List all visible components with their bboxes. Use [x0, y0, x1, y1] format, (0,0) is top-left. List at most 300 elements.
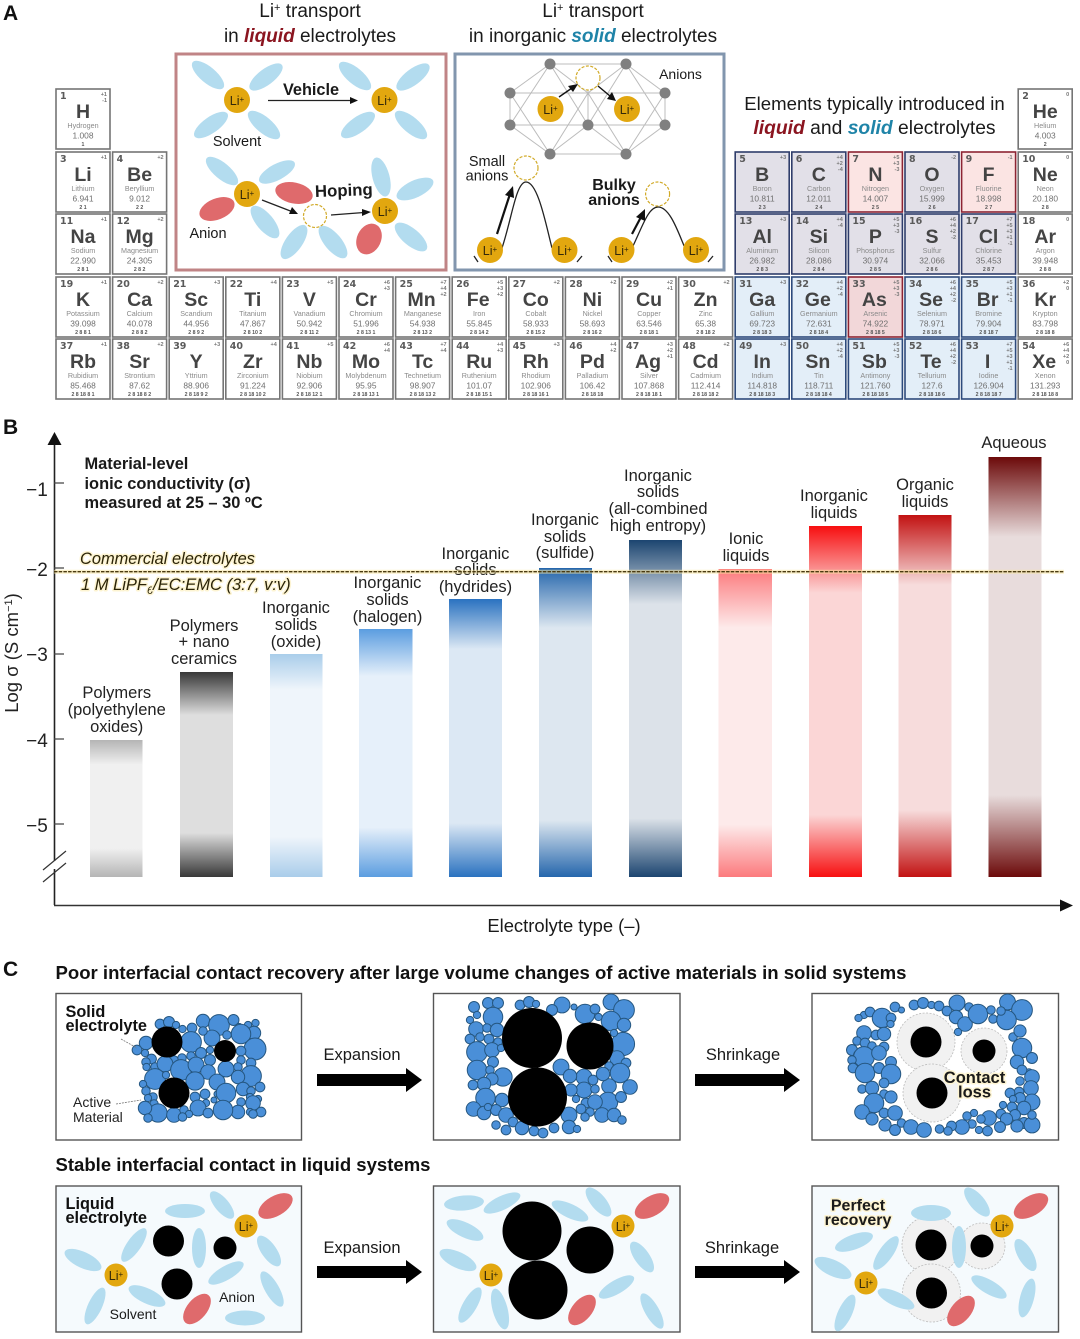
element Tc: 98.907	[410, 380, 436, 390]
element Sb: Antimony	[860, 371, 891, 380]
element S: S	[925, 226, 939, 248]
element Sb: +5	[893, 342, 899, 348]
element Se: +4	[950, 286, 957, 292]
y tick labels: −1	[26, 480, 48, 501]
element In: 114.818	[747, 380, 777, 390]
element Sc	[169, 277, 223, 337]
element Nb: 2 8 18 12 1	[296, 392, 322, 398]
element Ge: +2	[837, 286, 843, 292]
element Kr: 2 8 18 8	[1036, 330, 1055, 336]
panel letter A: A	[3, 2, 18, 25]
element Be: Be	[127, 164, 152, 186]
element Al	[735, 214, 789, 274]
element Ne: 10	[1022, 154, 1036, 165]
element As: +5	[893, 280, 899, 286]
shrunken active particles	[910, 1026, 996, 1108]
element In: In	[754, 351, 771, 373]
element Ca: +2	[157, 280, 164, 286]
element B: 10.811	[750, 194, 775, 204]
bar labels: Polymers	[82, 684, 151, 702]
element Sb: 2 8 18 18 5	[862, 392, 888, 398]
element P: 2 8 5	[870, 267, 881, 273]
element Se	[905, 277, 959, 337]
element I: +3	[1006, 354, 1013, 360]
x axis arrow	[54, 900, 1073, 912]
reference line: commercial electrolytes	[54, 570, 1064, 574]
element N: +5	[893, 155, 899, 161]
element Sn: +4	[837, 342, 843, 348]
element C: 12.011	[806, 194, 832, 204]
element I: +7	[1006, 342, 1013, 348]
element Cl: +5	[1006, 223, 1013, 229]
anion lattice: Li	[543, 103, 553, 117]
lithium ions: +	[494, 1270, 499, 1279]
element Si: +4	[837, 217, 843, 223]
heading: liquid transport: in liquid electrolytes	[224, 26, 396, 47]
element Na: Sodium	[71, 246, 95, 255]
bar labels: Organic	[896, 476, 954, 494]
element Xe: Xe	[1032, 351, 1056, 373]
element Se: 78.971	[919, 318, 945, 328]
solvent molecules	[61, 1187, 288, 1327]
element Xe: 131.293	[1030, 380, 1061, 390]
label: Vehicle: Vehicle	[283, 81, 339, 99]
element Fe: +3	[497, 286, 503, 292]
element Ar: Ar	[1034, 226, 1056, 248]
element Si: -4	[838, 223, 844, 229]
label: electrolyte composition: 6	[147, 585, 154, 597]
element K	[56, 277, 110, 337]
lithium ions: Li	[239, 1220, 249, 1234]
element Fe: Fe	[467, 289, 490, 311]
element Ge: -4	[838, 292, 844, 298]
solvent molecules	[436, 1183, 668, 1332]
element Cd: +2	[723, 342, 730, 348]
hopping start shell: Li	[240, 188, 250, 202]
element Cl: -1	[1008, 241, 1013, 247]
element Zr: 40	[230, 341, 243, 352]
small anion barrier	[474, 156, 582, 263]
hopping vacancy	[276, 204, 352, 263]
element Br: +1	[1006, 292, 1013, 298]
bulky anion barrier: Li	[689, 244, 699, 258]
element Ru: Ru	[466, 351, 492, 373]
bar: inorganic liquids	[809, 526, 862, 877]
element K: 19	[60, 279, 73, 290]
element As: +3	[893, 286, 899, 292]
element Fe: 26	[456, 279, 470, 290]
element Tc: +7	[440, 342, 447, 348]
element I: +5	[1006, 348, 1013, 354]
bar labels: solids	[637, 483, 679, 501]
element Te: +2	[950, 354, 956, 360]
element N: -3	[895, 167, 899, 173]
element Fe: +2	[497, 292, 503, 298]
element Mg	[113, 214, 167, 274]
element Li: Lithium	[71, 184, 95, 193]
lithium ions	[480, 1214, 634, 1286]
element Li: 2 1	[79, 205, 87, 211]
element Si: 14	[796, 216, 809, 227]
element Ni: +2	[610, 280, 616, 286]
element Ge: +4	[837, 280, 843, 286]
element Ag: Ag	[635, 351, 661, 373]
element Co: 27	[513, 279, 526, 290]
label: solid electrolyte: electrolyte	[66, 1017, 147, 1035]
element Pd: +2	[610, 348, 616, 354]
element H: 1.008	[73, 130, 94, 140]
element Fe: 55.845	[466, 318, 492, 328]
element Co: Cobalt	[525, 309, 546, 318]
arrow: expansion, solid	[317, 1068, 422, 1092]
element Pd: 46	[569, 341, 583, 352]
element Kr: 36	[1022, 279, 1036, 290]
element I: +1	[1006, 360, 1013, 366]
element H: H	[76, 101, 90, 123]
label: solvent: Solvent	[110, 1306, 156, 1322]
element Zn: 65.38	[695, 318, 716, 328]
element He: 2	[1044, 142, 1047, 148]
vehicle solvation shell, right	[335, 57, 434, 144]
element Ga	[735, 277, 789, 337]
element Cl	[962, 214, 1016, 274]
arrow: expansion, liquid	[317, 1260, 422, 1284]
element Zn: Zn	[694, 289, 718, 311]
bar labels: Aqueous	[981, 434, 1047, 452]
element Sc: Sc	[184, 289, 208, 311]
element Zr: Zr	[243, 351, 263, 373]
element Br: 2 8 18 7	[979, 330, 998, 336]
element Be: 2 2	[136, 205, 143, 211]
arrow: shrinkage, solid	[695, 1068, 800, 1092]
element Ru: 44	[456, 341, 470, 352]
label: Small anions: anions	[466, 168, 508, 184]
element Ne	[1018, 152, 1072, 212]
element N: 7	[852, 154, 859, 165]
element Rh: +3	[554, 342, 560, 348]
vehicle solvation shell, left	[188, 56, 287, 144]
element Mo	[339, 339, 393, 399]
element Nb: +5	[327, 342, 333, 348]
element B: B	[755, 164, 769, 186]
element Br: +5	[1006, 280, 1013, 286]
element Ag: 2 8 18 18 1	[636, 392, 662, 398]
heading: solid transport: +	[557, 2, 563, 14]
element Tc	[396, 339, 450, 399]
element N: +3	[893, 161, 899, 167]
element Tc: 43	[400, 341, 413, 352]
element Li	[56, 152, 110, 212]
element Kr: Krypton	[1033, 309, 1058, 318]
bar labels: + nano	[179, 633, 229, 651]
element Ca: 20	[117, 279, 130, 290]
element Na: 2 8 1	[77, 267, 89, 273]
element Cr	[339, 277, 393, 337]
heading: elements	[744, 93, 1005, 139]
element Mg: Magnesium	[121, 246, 158, 255]
element Fe: Iron	[473, 309, 485, 318]
bar labels: (polyethylene	[68, 701, 166, 719]
element Ga: +3	[780, 280, 786, 286]
element C: +4	[837, 155, 843, 161]
element Zr: +4	[271, 342, 278, 348]
label: liquid electrolyte: Liquid	[66, 1195, 114, 1213]
bar labels: (oxide)	[271, 633, 321, 651]
element Y: 39	[173, 341, 186, 352]
label: Small anions: Small	[469, 154, 505, 170]
element O: -2	[951, 155, 956, 161]
element Nb	[282, 339, 336, 399]
element Ni: 2 8 16 2	[583, 330, 602, 336]
element I: 2 8 18 18 7	[976, 392, 1002, 398]
element Be: 9.012	[129, 194, 150, 204]
element Xe: +4	[1063, 348, 1070, 354]
element F	[962, 152, 1016, 212]
element Ti: Ti	[244, 289, 261, 311]
y tick labels: −3	[26, 645, 48, 666]
element Ni	[565, 277, 619, 337]
element S: 32.066	[919, 256, 945, 266]
expanded active particles	[502, 1202, 614, 1320]
heading: elements: liquid and solid electrolytes	[753, 118, 996, 139]
note: measurement conditions: Material-level	[84, 455, 188, 473]
element C: C	[812, 164, 826, 186]
bar labels: high entropy)	[610, 517, 706, 535]
element F: Fluorine	[976, 184, 1002, 193]
element Mo: +6	[384, 342, 390, 348]
element V: 2 8 11 2	[300, 330, 319, 336]
bar: inorganic halogen	[359, 629, 412, 877]
element O: Oxygen	[920, 184, 944, 193]
solvent molecules	[811, 1183, 1041, 1334]
element I: 53	[966, 341, 979, 352]
element Li: 6.941	[73, 194, 94, 204]
element Se: +2	[950, 292, 956, 298]
element Te: 127.6	[922, 380, 943, 390]
element As: As	[862, 289, 887, 311]
element Cd	[679, 339, 733, 399]
element Nb: 41	[286, 341, 300, 352]
element Rh: Rh	[523, 351, 549, 373]
retained electrolyte particles	[847, 994, 1040, 1137]
hopping arrows	[262, 200, 371, 216]
element Cu: Copper	[637, 309, 661, 318]
element H: 1	[60, 91, 67, 102]
element Cd: Cd	[693, 351, 719, 373]
element S: Sulfur	[923, 246, 942, 255]
element Rh: 45	[513, 341, 526, 352]
element Cd: 48	[683, 341, 696, 352]
element Ag: +1	[667, 354, 673, 360]
element Ru	[452, 339, 506, 399]
vehicle solvation shell, right: Li	[377, 94, 387, 108]
bulky anion barrier: Li	[614, 244, 624, 258]
bulky anion barrier: +	[624, 245, 629, 254]
element V: 23	[286, 279, 300, 290]
element Ge: 2 8 18 4	[809, 330, 828, 336]
periodic table	[56, 89, 1072, 399]
element Ru: 101.07	[466, 380, 492, 390]
element Tc: +4	[440, 348, 448, 354]
element Ni: 58.693	[580, 318, 606, 328]
element K: 2 8 8 1	[75, 330, 91, 336]
element P: P	[869, 226, 882, 248]
heading: liquid transport	[224, 1, 396, 47]
small anion barrier: +	[493, 245, 498, 254]
element Mn: 54.938	[410, 318, 436, 328]
label: contact loss: Contact	[944, 1069, 1005, 1087]
element I: 126.904	[973, 380, 1004, 390]
element I: -1	[1008, 366, 1013, 372]
element Fe: +5	[497, 280, 503, 286]
element B: 5	[739, 154, 746, 165]
bar labels: liquids	[902, 493, 948, 511]
element Rb: Rb	[70, 351, 96, 373]
bar labels: Inorganic	[354, 574, 421, 592]
element Mn: +2	[440, 292, 447, 298]
note: measurement conditions: measured at 25 – 30 ºC	[84, 494, 263, 512]
bar labels: solids	[366, 591, 409, 609]
shrunken active particles	[916, 1230, 994, 1308]
element S: +6	[950, 217, 956, 223]
element P: +3	[893, 223, 899, 229]
element Y	[169, 339, 223, 399]
element Mo: 95.95	[356, 380, 377, 390]
element Zr: 2 8 18 10 2	[240, 392, 266, 398]
element B: Boron	[753, 184, 772, 193]
label: Hoping: Hoping	[315, 180, 373, 201]
bar: polymers	[90, 740, 142, 877]
lithium ions: +	[869, 1278, 874, 1287]
bar labels	[68, 434, 1047, 736]
anion lattice	[504, 58, 670, 160]
element Ni: 28	[569, 279, 583, 290]
element Te: 52	[909, 341, 922, 352]
element Cl: +1	[1006, 235, 1013, 241]
element Cl: +3	[1006, 229, 1013, 235]
label: Solvent: Solvent	[213, 134, 261, 150]
element Mg: 24.305	[127, 256, 153, 266]
element H: 1	[82, 142, 85, 148]
element Te: Tellurium	[918, 371, 946, 380]
element Rb	[56, 339, 110, 399]
element H	[56, 89, 110, 149]
element Sc: 44.956	[183, 318, 209, 328]
element H: Hydrogen	[67, 121, 99, 130]
x axis title: Electrolyte type (–)	[487, 915, 641, 936]
label: anion: Anion	[219, 1289, 255, 1305]
element Ge: 32	[796, 279, 809, 290]
element F: F	[983, 164, 995, 186]
element Cu: 2 8 18 1	[640, 330, 658, 336]
bar: ionic liquids	[718, 569, 772, 877]
element Mo: Molybdenum	[345, 371, 387, 380]
element Kr: 0	[1066, 286, 1069, 292]
element Te: +6	[950, 342, 956, 348]
element Xe: 54	[1022, 341, 1036, 352]
element Rb: 37	[60, 341, 73, 352]
bar labels: (hydrides)	[439, 578, 512, 596]
element Na: 11	[60, 216, 73, 227]
element Pd: Pd	[580, 351, 605, 373]
element Sn: -4	[838, 354, 844, 360]
element Kr: Kr	[1034, 289, 1056, 311]
element He	[1018, 89, 1072, 149]
element Sn	[792, 339, 846, 399]
element I: Iodine	[979, 371, 998, 380]
small anion barrier: Li	[557, 244, 567, 258]
label: Anions: Anions	[659, 66, 702, 82]
element Ca: 2 8 8 2	[132, 330, 148, 336]
element Se: 34	[909, 279, 923, 290]
element Sb: 121.760	[860, 380, 891, 390]
element Y: Y	[190, 351, 203, 373]
element Rh	[509, 339, 563, 399]
element Ag: 107.868	[634, 380, 664, 390]
heading: elements: Elements typically introduced in	[744, 93, 1005, 114]
element Te: 2 8 18 18 6	[919, 392, 945, 398]
element Ne: Neon	[1037, 184, 1054, 193]
bar labels: Inorganic	[262, 599, 330, 617]
element Ar: 18	[1022, 216, 1036, 227]
bar labels: Inorganic	[531, 511, 599, 529]
element Rh: 2 8 18 16 1	[523, 392, 549, 398]
element Co: 2 8 15 2	[526, 330, 545, 336]
element Ru: +4	[497, 342, 503, 348]
element Ar: 0	[1066, 217, 1069, 223]
element Pd: 2 8 18 18	[582, 392, 603, 398]
element Zn: 30	[683, 279, 696, 290]
element C: -4	[838, 167, 844, 173]
element Ca: Ca	[127, 289, 152, 311]
expanded active particles	[502, 1008, 614, 1126]
element In: 2 8 18 18 3	[749, 392, 775, 398]
lithium ions	[104, 1214, 258, 1286]
element Sc: 21	[173, 279, 186, 290]
element Ru: 2 8 18 15 1	[466, 392, 492, 398]
element K: Potassium	[66, 309, 100, 318]
element Na: Na	[71, 226, 96, 248]
element O: O	[924, 164, 940, 186]
element Ag: +3	[667, 342, 673, 348]
element In	[735, 339, 789, 399]
bar: polymers + nano ceramics	[180, 672, 233, 877]
element Sr	[113, 339, 167, 399]
panel: liquid recovered state	[811, 1183, 1058, 1334]
element N: N	[868, 164, 882, 186]
solid electrolyte particles	[132, 1014, 266, 1122]
anion lattice: Li	[620, 103, 630, 117]
element Ge: Ge	[805, 289, 831, 311]
element Mn	[396, 277, 450, 337]
bar: aqueous	[988, 457, 1042, 877]
element Sb: 51	[852, 341, 866, 352]
label: solid electrolyte: Solid	[66, 1003, 105, 1021]
element Cu: 63.546	[636, 318, 662, 328]
hopping end shell: +	[388, 206, 393, 215]
hopping end shell: Li	[378, 205, 388, 219]
element Pd: 106.42	[580, 380, 606, 390]
element Kr	[1018, 277, 1072, 337]
element Fe: 2 8 14 2	[470, 330, 489, 336]
element Zn	[679, 277, 733, 337]
element Sr: +2	[157, 342, 164, 348]
element He: 4.003	[1035, 130, 1056, 140]
anions	[942, 1188, 1052, 1331]
label: expansion, solid: Expansion	[323, 1046, 401, 1064]
y axis with ticks	[40, 432, 66, 905]
element Cl: Chlorine	[975, 246, 1002, 255]
